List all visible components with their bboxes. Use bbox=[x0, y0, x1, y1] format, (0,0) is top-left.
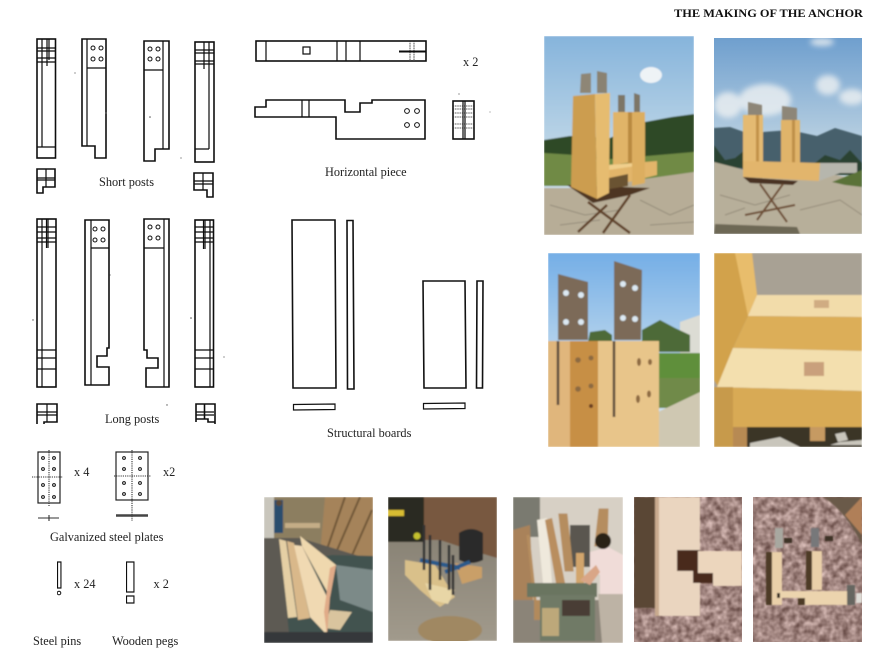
horizontal piece top view bbox=[256, 41, 426, 61]
large plate bbox=[114, 450, 151, 521]
multiplier x 2: x 2 bbox=[463, 55, 478, 69]
icon: pin bbox=[57, 562, 61, 595]
horizontal piece side view bbox=[255, 100, 425, 139]
panel: long posts drawings bbox=[37, 219, 215, 424]
panel: horizontal piece drawings bbox=[255, 41, 478, 179]
multiplier x 2: x 2 bbox=[154, 577, 169, 591]
short post side view 2 bbox=[195, 42, 214, 162]
long post front bbox=[85, 220, 109, 385]
photo: glued boards on table saw bbox=[264, 497, 373, 643]
multiplier x 4: x 4 bbox=[74, 465, 89, 479]
short post front with holes bbox=[82, 39, 106, 158]
photo: mortise and tenon joint on granite bbox=[634, 497, 742, 642]
scanning specks bbox=[32, 72, 491, 406]
photo: anchor on table, three quarter view bbox=[544, 36, 694, 235]
label: horizontal piece: Horizontal piece bbox=[325, 165, 407, 179]
title: THE MAKING OF THE ANCHOR bbox=[674, 8, 864, 20]
panel: structural boards drawings bbox=[292, 220, 483, 440]
short post end section left bbox=[37, 169, 55, 193]
photo: anchor on table, front view bbox=[714, 38, 865, 234]
photo: steel plates in posts bbox=[548, 253, 700, 447]
large board edge bbox=[347, 220, 354, 389]
label: long posts: Long posts bbox=[105, 412, 160, 426]
label: short posts: Short posts bbox=[99, 175, 154, 189]
photo: clamped timber pieces in workshop bbox=[388, 497, 497, 644]
panel: galvanized steel plates bbox=[32, 450, 175, 544]
long post side view 2 bbox=[195, 220, 214, 387]
photo: carpenter at spindle moulder bbox=[513, 497, 623, 643]
short post side view 1 bbox=[37, 39, 56, 158]
small board end bbox=[424, 403, 465, 409]
small board front bbox=[423, 281, 466, 388]
large board end bbox=[294, 404, 335, 410]
label: wooden pegs: Wooden pegs bbox=[112, 634, 179, 648]
long post end section left bbox=[37, 404, 57, 424]
small plate bbox=[32, 450, 63, 521]
panel: wooden pegs bbox=[112, 562, 179, 648]
photo: joint detail with wooden pegs bbox=[714, 253, 862, 447]
photo: anchor pieces laid out on granite bbox=[753, 497, 862, 642]
long post end section right bbox=[196, 404, 215, 424]
horizontal piece end section bbox=[453, 101, 474, 139]
small board edge bbox=[476, 281, 483, 388]
large board front bbox=[292, 220, 336, 388]
long post back bbox=[144, 219, 169, 387]
panel: short posts drawings bbox=[37, 39, 214, 197]
panel: steel pins bbox=[33, 562, 96, 648]
short post back with holes bbox=[144, 41, 169, 161]
label: galvanized steel plates: Galvanized steel plates bbox=[50, 530, 164, 544]
icon: peg bbox=[126, 562, 134, 603]
short post end section right bbox=[194, 173, 213, 197]
long post side view 1 bbox=[37, 219, 56, 387]
label: steel pins: Steel pins bbox=[33, 634, 81, 648]
label: structural boards: Structural boards bbox=[327, 426, 412, 440]
multiplier x2: x2 bbox=[163, 465, 175, 479]
multiplier x 24: x 24 bbox=[74, 577, 96, 591]
